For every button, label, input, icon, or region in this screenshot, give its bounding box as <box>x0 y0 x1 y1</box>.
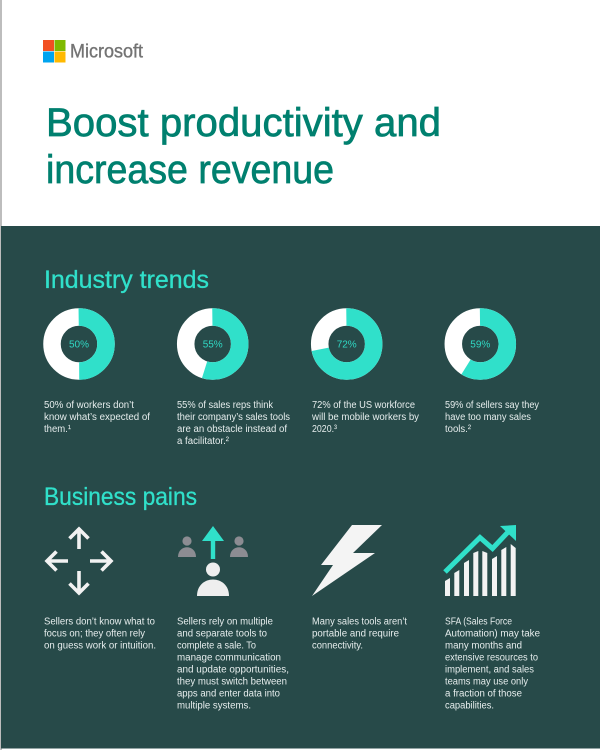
text: trend 2: their company’s sales tools <box>177 412 290 423</box>
text: pain 2 <box>177 616 289 712</box>
text: trend 1: them.¹ <box>44 424 72 435</box>
donut chart: 72% <box>320 317 374 371</box>
heading: Business pains: Business pains <box>44 483 197 511</box>
text: pain 1: focus on; they often rely <box>44 628 145 640</box>
text: pain 4: many months and <box>445 640 522 652</box>
text: pain 1: on guess work or intuition. <box>44 640 156 652</box>
text: trend 3: 72% of the US workforce <box>312 400 415 411</box>
text: trend 2: are an obstacle instead of <box>177 424 287 435</box>
text: trend 2: a facilitator.² <box>177 436 230 447</box>
donut chart: 72%: 72% <box>337 340 357 350</box>
text: trend 4 <box>445 400 539 435</box>
title: Boost productivity and <box>46 101 441 145</box>
text: pain 2: complete a sale. To <box>177 640 256 652</box>
text: pain 4: implement, and sales <box>445 664 534 676</box>
text: pain 4: SFA (Sales Force <box>445 616 512 628</box>
donut chart: 55%: 55% <box>203 340 223 350</box>
text: pain 1 <box>44 616 156 652</box>
panel: dark background <box>1 226 600 748</box>
text: pain 2: and separate tools to <box>177 628 267 640</box>
text: trend 2 <box>177 400 290 447</box>
text: trend 4: have too many sales <box>445 412 531 423</box>
text: pain 1: Sellers don’t know what to <box>44 616 155 628</box>
title <box>46 101 441 192</box>
text: pain 4: a fraction of those <box>445 688 522 700</box>
title: increase revenue <box>46 148 334 192</box>
text: pain 3: connectivity. <box>312 640 363 652</box>
text: pain 4 <box>445 616 540 712</box>
icon: lightning bolt <box>312 525 382 596</box>
text: pain 2: they must switch between <box>177 676 287 688</box>
heading: Industry trends: Industry trends <box>44 266 209 294</box>
logo: Microsoft <box>43 40 144 62</box>
donut chart: 59% <box>453 317 507 371</box>
donut chart: 50%: 50% <box>69 340 89 350</box>
text: trend 2: 55% of sales reps think <box>177 400 274 411</box>
text: pain 4: teams may use only <box>445 676 528 688</box>
logo: Microsoft: Microsoft <box>70 42 144 62</box>
text: trend 4: tools.² <box>445 424 472 435</box>
text: trend 3: 2020.³ <box>312 424 338 435</box>
text: pain 2: Sellers rely on multiple <box>177 616 273 628</box>
text: pain 3 <box>312 616 407 652</box>
text: trend 1: 50% of workers don’t <box>44 400 134 411</box>
text: trend 3 <box>311 400 419 435</box>
icon: four-way arrows <box>47 528 111 593</box>
text: pain 2: multiple systems. <box>177 700 251 712</box>
text: pain 2: manage communication <box>177 652 281 664</box>
text: trend 1 <box>44 400 150 435</box>
text: trend 3: will be mobile workers by <box>311 412 419 423</box>
donut chart: 59%: 59% <box>470 340 490 350</box>
text: pain 2: apps and enter data into <box>177 688 280 700</box>
text: pain 4: Automation) may take <box>445 628 540 640</box>
text: trend 1: know what’s expected of <box>44 412 150 423</box>
donut chart: 55% <box>186 317 240 371</box>
icon: person with upward arrow <box>178 526 248 596</box>
text: pain 3: portable and require <box>312 628 399 640</box>
icon: rising bar chart <box>445 525 516 596</box>
text: pain 2: and update opportunities, <box>177 664 289 676</box>
text: pain 4: capabilities. <box>445 700 494 712</box>
text: pain 3: Many sales tools aren’t <box>312 616 407 628</box>
donut chart: 50% <box>52 317 106 371</box>
text: trend 4: 59% of sellers say they <box>445 400 539 411</box>
text: pain 4: extensive resources to <box>445 652 538 664</box>
